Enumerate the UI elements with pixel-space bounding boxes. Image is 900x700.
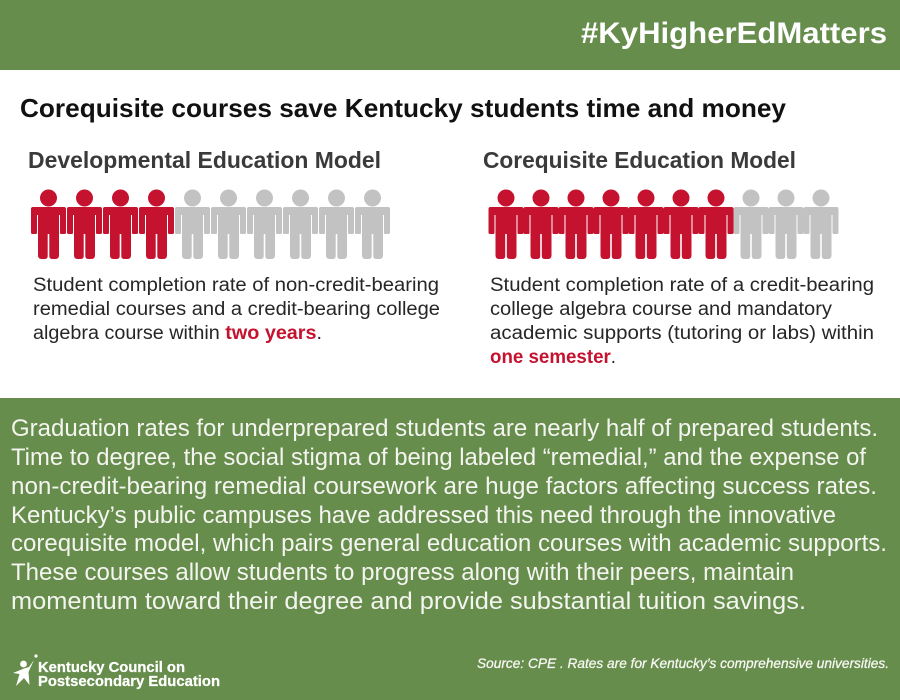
- body paragraph: corequisite model, which pairs general education courses with academic supports.: [11, 530, 887, 557]
- body paragraph: These courses allow students to progress along with their peers, maintain: [11, 559, 794, 586]
- title: Corequisite courses save Kentucky students time and money: [20, 93, 787, 123]
- panel: developmental model: [28, 147, 440, 344]
- body paragraph: Kentucky’s public campuses have addressed this need through the innovative: [11, 502, 836, 529]
- description: developmental: Student completion rate of non-credit-bearing: [33, 275, 439, 296]
- description: corequisite: Student completion rate of a credit-bearing: [490, 275, 874, 296]
- logo: Kentucky Council on Postsecondary Education: [13, 654, 220, 690]
- heading: corequisite: Corequisite Education Model: [483, 147, 796, 173]
- description: corequisite: one semester.: [490, 347, 616, 368]
- hashtag: #KyHigherEdMatters: [581, 17, 887, 50]
- pictogram: 7 of 10 students: [488, 190, 838, 259]
- body paragraph: [11, 415, 887, 615]
- icon: reaching figure: [13, 654, 38, 686]
- header band: [0, 0, 900, 70]
- description: developmental: remedial courses and a credit-bearing college: [33, 299, 440, 320]
- description: corequisite: college algebra course and mandatory: [490, 299, 833, 320]
- pictogram: 4 of 10 students: [31, 190, 390, 259]
- logo wordmark: Postsecondary Education: [38, 673, 220, 690]
- description: developmental: [33, 275, 440, 344]
- body paragraph: momentum toward their degree and provide substantial tuition savings.: [11, 588, 806, 615]
- description: corequisite: academic supports (tutoring or labs) within: [490, 323, 874, 344]
- panel: green footer: [0, 398, 900, 700]
- description: developmental: algebra course within two years.: [33, 323, 322, 344]
- body paragraph: Graduation rates for underprepared students are nearly half of prepared students.: [11, 415, 878, 442]
- body paragraph: non-credit-bearing remedial coursework are huge factors affecting success rates.: [11, 473, 877, 500]
- body paragraph: Time to degree, the social stigma of being labeled “remedial,” and the expense of: [11, 444, 866, 471]
- logo wordmark: Kentucky Council on: [38, 659, 185, 676]
- heading: developmental: Developmental Education Model: [28, 147, 381, 173]
- panel: corequisite model: [483, 147, 874, 368]
- description: corequisite: [490, 275, 874, 368]
- logo wordmark: [38, 659, 220, 690]
- source note: Source: CPE . Rates are for Kentucky’s comprehensive universities.: [477, 655, 889, 671]
